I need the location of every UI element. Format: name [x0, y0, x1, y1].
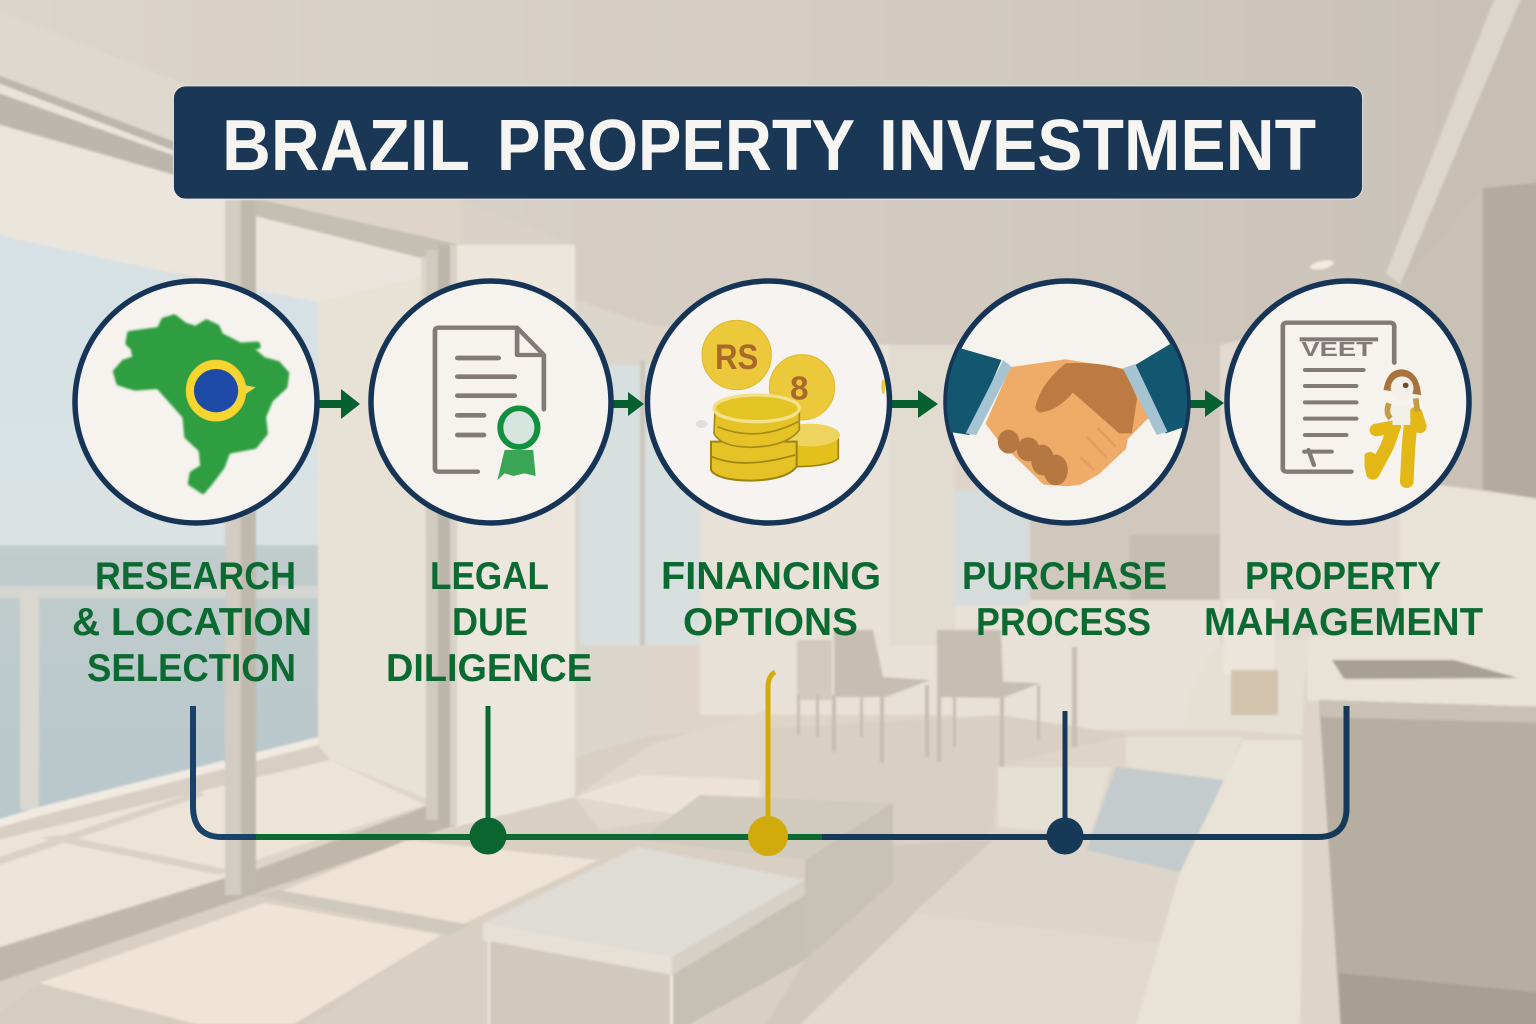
- back table box: [640, 795, 893, 860]
- label 1: [72, 555, 312, 690]
- door frame column: [225, 200, 241, 895]
- icon: document with seal: [435, 328, 544, 480]
- arrow: step 4 to 5: [1188, 390, 1224, 417]
- label 4: [962, 555, 1167, 644]
- icon: contract and person: [1283, 323, 1421, 482]
- label 5: PROPERTY: [1245, 555, 1441, 598]
- label 2: DILIGENCE: [386, 647, 592, 690]
- title: INVESTMENT: [879, 106, 1316, 186]
- label 1: SELECTION: [87, 647, 296, 690]
- circle 2: [371, 281, 611, 523]
- label 2: [386, 555, 592, 690]
- step 1: research and location: [72, 281, 317, 690]
- label 5: [1204, 555, 1483, 644]
- sunlit patch A: [39, 903, 441, 1024]
- arrow: step 2 to 3: [610, 392, 644, 416]
- step 4: purchase process: [937, 281, 1194, 644]
- label 4: PURCHASE: [962, 555, 1167, 598]
- label 2: DUE: [452, 601, 528, 644]
- icon: handshake: [947, 343, 1187, 486]
- cooktop: [1332, 660, 1518, 679]
- icon: contract and person: VEET: [1301, 338, 1373, 361]
- node: green: [470, 818, 506, 854]
- step 2: legal due diligence: [371, 281, 611, 690]
- label 3: [661, 555, 881, 644]
- title: [222, 106, 1316, 186]
- inner floor behind glass: [0, 760, 425, 950]
- dining chairs: [797, 630, 1077, 767]
- sill: [0, 737, 318, 830]
- ceiling beam right: [1386, 0, 1525, 285]
- kitchen island: [1319, 700, 1536, 1024]
- window: sky and sea: [0, 233, 225, 840]
- shelf with box: [1185, 640, 1307, 735]
- circle 4: [946, 281, 1188, 523]
- title: PROPERTY: [497, 106, 855, 186]
- floor: [0, 715, 1130, 1024]
- circle 5: [1227, 281, 1469, 523]
- back wall right: [1220, 300, 1400, 680]
- step 3: financing options: [648, 281, 890, 644]
- icon: gold coins: [696, 320, 885, 481]
- sofa: [998, 767, 1111, 833]
- sunlit patch B: [279, 840, 598, 925]
- ceiling: [0, 0, 1536, 345]
- title: BRAZIL: [222, 106, 470, 186]
- node: navy: [1046, 818, 1084, 854]
- label 5: MAHAGEMENT: [1204, 601, 1483, 644]
- arrow: step 1 to 2: [318, 389, 360, 419]
- label 4: PROCESS: [976, 601, 1151, 644]
- label 3: OPTIONS: [683, 601, 858, 644]
- icon: gold coins: RS: [715, 338, 758, 377]
- icon: gold coins: 8: [790, 370, 809, 407]
- label 1: RESEARCH: [95, 555, 296, 598]
- label 3: FINANCING: [661, 555, 881, 598]
- pier: [318, 277, 430, 800]
- door sill: [0, 805, 456, 985]
- label 2: LEGAL: [430, 555, 549, 598]
- circle 3: [648, 281, 890, 523]
- coffee table: [488, 940, 672, 1024]
- wall beside door: [456, 245, 575, 827]
- top door rail: [255, 200, 461, 258]
- node: gold: [748, 816, 788, 856]
- step 5: property management: [1204, 281, 1483, 644]
- upper wall band: [0, 8, 181, 145]
- timeline connector: [193, 672, 1346, 856]
- mid windows: [580, 365, 700, 645]
- right door frame: [426, 250, 438, 820]
- icon: Brazil map: [115, 317, 287, 492]
- arrow: step 3 to 4: [888, 390, 938, 418]
- title banner: [174, 86, 1362, 199]
- label 1: & LOCATION: [72, 601, 312, 644]
- circle 1: [75, 281, 317, 523]
